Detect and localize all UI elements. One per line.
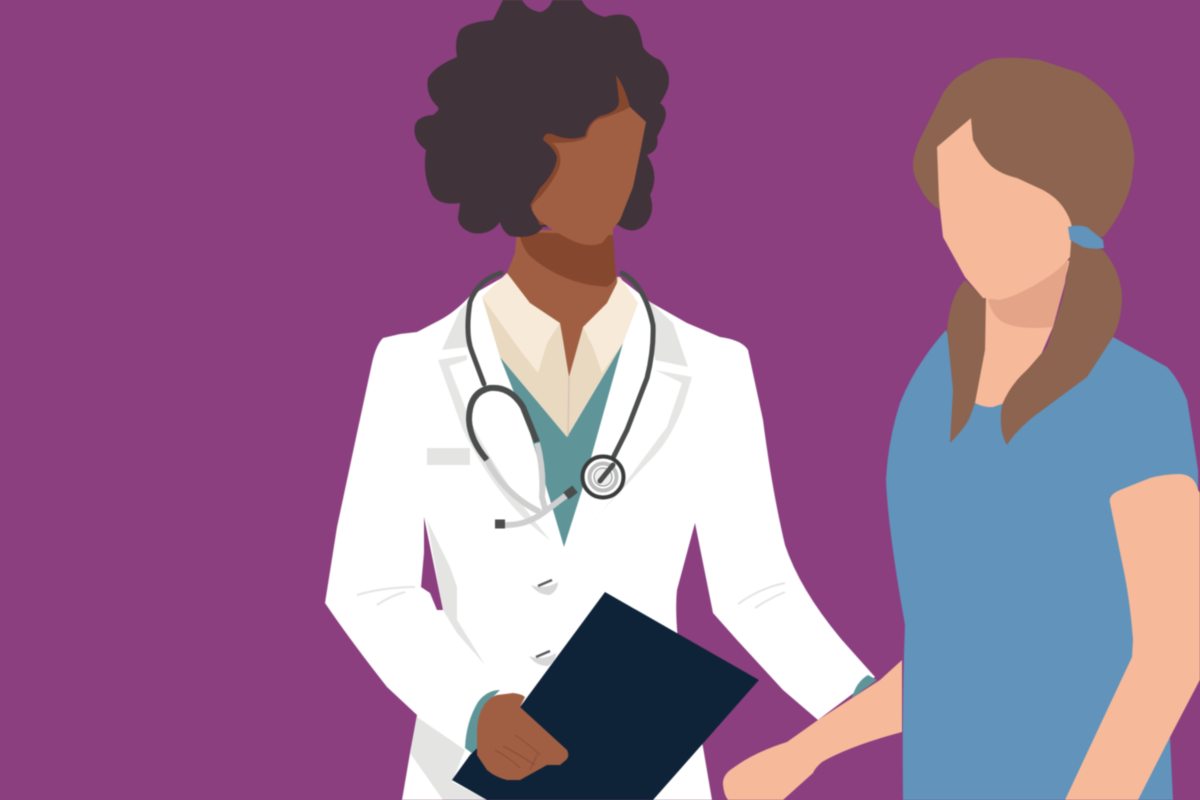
- left lapel fill: [442, 297, 473, 350]
- stethoscope dark loop: [469, 388, 537, 460]
- patient left hair lock: [947, 280, 986, 443]
- patient upper arm: [1065, 474, 1200, 800]
- stethoscope grey tube: [487, 443, 546, 512]
- coat lower shadow: [410, 717, 487, 800]
- doctor hair: [414, 0, 669, 237]
- right lapel fill: [650, 302, 688, 367]
- doctor face: [532, 107, 646, 245]
- right lapel border: [577, 370, 692, 540]
- coat pocket: [427, 448, 470, 465]
- stethoscope left tube: [468, 273, 501, 384]
- stethoscope: [468, 273, 653, 525]
- coat button top: [531, 572, 558, 595]
- patient neck shadow: [988, 260, 1068, 328]
- coat wrinkles left: [357, 587, 415, 605]
- teal scrubs: [500, 343, 623, 547]
- patient hair top: [913, 58, 1134, 240]
- patient shirt: [886, 330, 1200, 800]
- shirt collar right: [583, 277, 638, 373]
- cream shirt: [482, 273, 638, 437]
- stethoscope earpieces: [503, 494, 568, 525]
- coat wrinkles right: [738, 583, 785, 608]
- stethoscope chestpiece: [582, 456, 624, 498]
- patient forearm and hand: [723, 660, 902, 800]
- doctor neck shadow: [519, 232, 616, 287]
- doctor neck: [507, 230, 617, 377]
- stethoscope right tube: [602, 273, 653, 480]
- clipboard: [452, 592, 759, 800]
- doctor hand: [477, 693, 568, 780]
- patient face: [937, 118, 1072, 300]
- hand finger lines: [495, 735, 540, 770]
- teal sleeve cuff right: [852, 675, 877, 698]
- lab coat body: [325, 275, 875, 800]
- doctor face shadow edge: [530, 75, 646, 225]
- coat side slit: [421, 517, 443, 610]
- shirt collar left: [482, 273, 560, 373]
- patient hair tie: [1068, 226, 1104, 249]
- patient right ponytail: [1001, 240, 1122, 445]
- coat button bottom: [529, 643, 556, 666]
- shirt seam: [568, 377, 569, 436]
- patient neck: [975, 260, 1070, 407]
- teal sleeve cuff left: [465, 690, 500, 757]
- coat side slit shadow: [427, 520, 485, 665]
- figure: patient: [723, 58, 1200, 800]
- figure: doctor: [325, 0, 877, 800]
- left lapel border: [438, 355, 550, 540]
